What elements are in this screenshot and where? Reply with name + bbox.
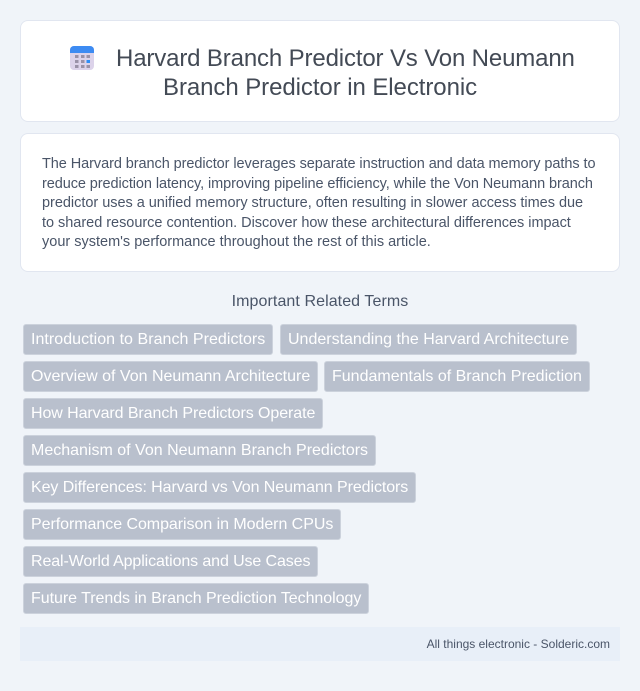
related terms heading: Important Related Terms xyxy=(232,293,408,310)
tag list: Overview of Von Neumann Architecture xyxy=(31,368,310,385)
footer xyxy=(20,627,620,661)
intro paragraph: your system's performance throughout the rest of this article. xyxy=(42,234,431,250)
icon: calendar grid xyxy=(70,46,94,70)
intro paragraph: The Harvard branch predictor leverages separate instruction and data memory paths to xyxy=(42,156,595,172)
tag list: Real-World Applications and Use Cases xyxy=(31,553,310,570)
intro text panel xyxy=(20,133,620,272)
intro paragraph: predictor uses a unified memory structure, often resulting in slower access times due xyxy=(42,195,583,211)
title: Harvard Branch Predictor Vs Von Neumann xyxy=(116,45,575,72)
tag list: Understanding the Harvard Architecture xyxy=(288,331,569,348)
tag list: Mechanism of Von Neumann Branch Predictors xyxy=(31,442,368,459)
intro paragraph: to shared resource contention. Discover how these architectural differences impact xyxy=(42,214,571,230)
tag list: How Harvard Branch Predictors Operate xyxy=(31,405,315,422)
tag list xyxy=(23,324,590,614)
tag list: Key Differences: Harvard vs Von Neumann Predictors xyxy=(31,479,408,496)
tag list: Fundamentals of Branch Prediction xyxy=(332,368,582,385)
intro paragraph xyxy=(42,156,595,250)
tag list: Introduction to Branch Predictors xyxy=(31,331,265,348)
intro paragraph: reduce prediction latency, improving pipeline efficiency, while the Von Neumann branch xyxy=(42,176,593,192)
tag list: Future Trends in Branch Prediction Technology xyxy=(31,590,361,607)
header card xyxy=(20,20,620,122)
tag list: Performance Comparison in Modern CPUs xyxy=(31,516,333,533)
footer: All things electronic - Solderic.com xyxy=(427,637,610,651)
title xyxy=(116,45,575,101)
title: Branch Predictor in Electronic xyxy=(163,74,477,101)
